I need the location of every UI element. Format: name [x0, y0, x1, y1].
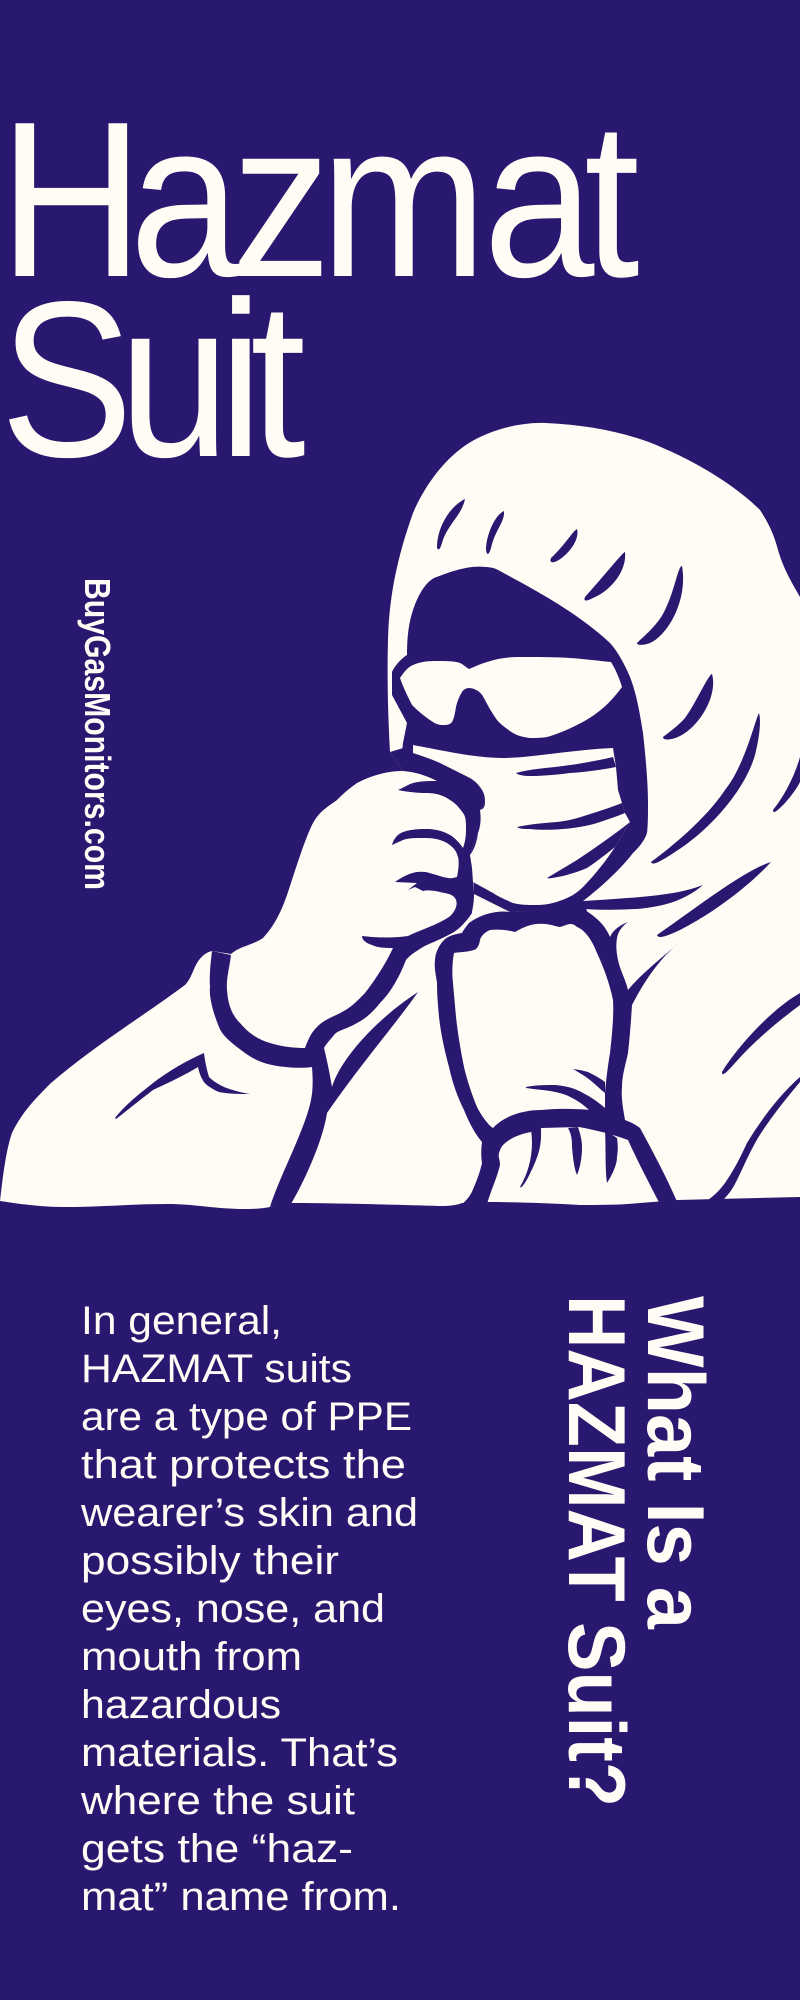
body text: hazardous [81, 1683, 281, 1727]
body text: mouth from [81, 1635, 302, 1679]
rotated heading [551, 1295, 720, 1807]
body text: materials. That’s [81, 1731, 398, 1775]
rotated heading: HAZMAT Suit? [551, 1295, 641, 1807]
cuff creases [520, 1069, 618, 1187]
body text: wearer’s skin and [80, 1491, 418, 1535]
hood creases [437, 499, 800, 937]
goggles lens [400, 657, 622, 738]
body text: mat” name from. [81, 1875, 401, 1919]
website label: BuyGasMonitors.com [77, 578, 118, 890]
rotated heading: What Is a [630, 1296, 720, 1630]
body text: possibly their [81, 1539, 339, 1583]
title [0, 75, 640, 503]
fist and forearm outline [435, 910, 680, 1204]
mask fold lines [516, 757, 630, 878]
hood opening [392, 567, 648, 912]
title: Suit [0, 255, 306, 503]
face mask [413, 745, 630, 905]
body text: are a type of PPE [81, 1395, 412, 1439]
body creases [115, 993, 800, 1200]
fist fill [452, 924, 613, 1128]
body text [80, 1299, 418, 1919]
body text: that protects the [81, 1443, 406, 1487]
hand and arm outline [210, 745, 485, 1207]
body text: where the suit [80, 1779, 355, 1823]
body text: HAZMAT suits [81, 1347, 352, 1391]
illustration: worker in hazmat suit [0, 423, 800, 1209]
title: Hazmat [0, 75, 640, 323]
body text: eyes, nose, and [81, 1587, 385, 1631]
suit silhouette [0, 423, 800, 1209]
body text: gets the “haz- [81, 1827, 353, 1871]
body text: In general, [81, 1299, 282, 1343]
